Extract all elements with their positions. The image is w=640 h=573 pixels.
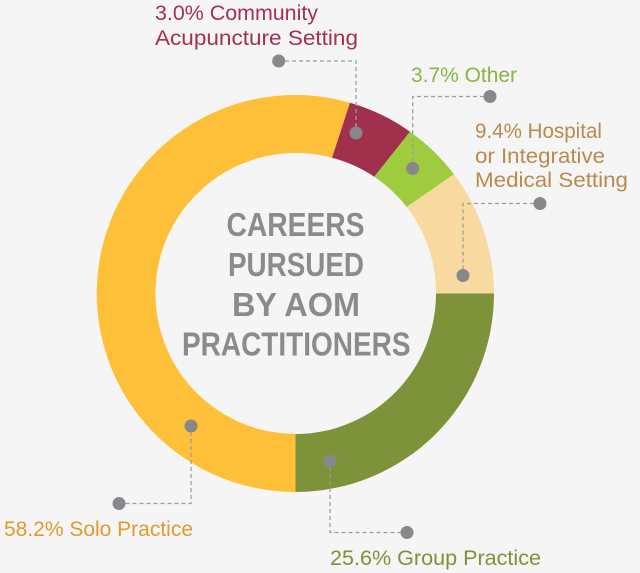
segment: community acupuncture 3.0% bbox=[332, 103, 410, 177]
title bbox=[182, 206, 410, 362]
label: hospital or integrative: Medical Setting bbox=[475, 169, 628, 192]
leader line: community acupuncture bbox=[272, 54, 362, 140]
donut chart bbox=[97, 95, 494, 492]
label: community acupuncture bbox=[155, 2, 358, 50]
label: community acupuncture: 3.0% Community bbox=[155, 2, 319, 25]
segment: hospital or integrative 9.4% bbox=[407, 174, 494, 294]
callout: solo practice bbox=[4, 420, 198, 541]
title: PURSUED bbox=[228, 246, 364, 283]
leader line: other bbox=[406, 90, 496, 175]
leader line: solo practice bbox=[112, 420, 198, 510]
title: PRACTITIONERS bbox=[182, 326, 410, 362]
label: other: 3.7% Other bbox=[411, 64, 517, 87]
label: group practice: 25.6% Group Practice bbox=[330, 547, 541, 570]
segment: other 3.7% bbox=[374, 132, 454, 207]
segment: solo practice 58.2% bbox=[97, 95, 350, 492]
label: solo practice: 58.2% Solo Practice bbox=[4, 518, 193, 541]
label: hospital or integrative: or Integrative bbox=[475, 145, 605, 168]
callout: hospital or integrative bbox=[456, 120, 628, 282]
callout: group practice bbox=[324, 454, 541, 570]
callout: community acupuncture bbox=[155, 2, 362, 140]
leader line: group practice bbox=[324, 454, 414, 539]
title: BY AOM bbox=[232, 286, 360, 323]
segment: group practice 25.6% bbox=[296, 294, 494, 492]
label: hospital or integrative: 9.4% Hospital bbox=[475, 120, 602, 143]
leader line: hospital or integrative bbox=[456, 197, 546, 282]
title: CAREERS bbox=[226, 206, 364, 243]
callout: other bbox=[406, 64, 517, 175]
label: hospital or integrative bbox=[475, 120, 628, 192]
label: community acupuncture: Acupuncture Setting bbox=[155, 27, 358, 50]
